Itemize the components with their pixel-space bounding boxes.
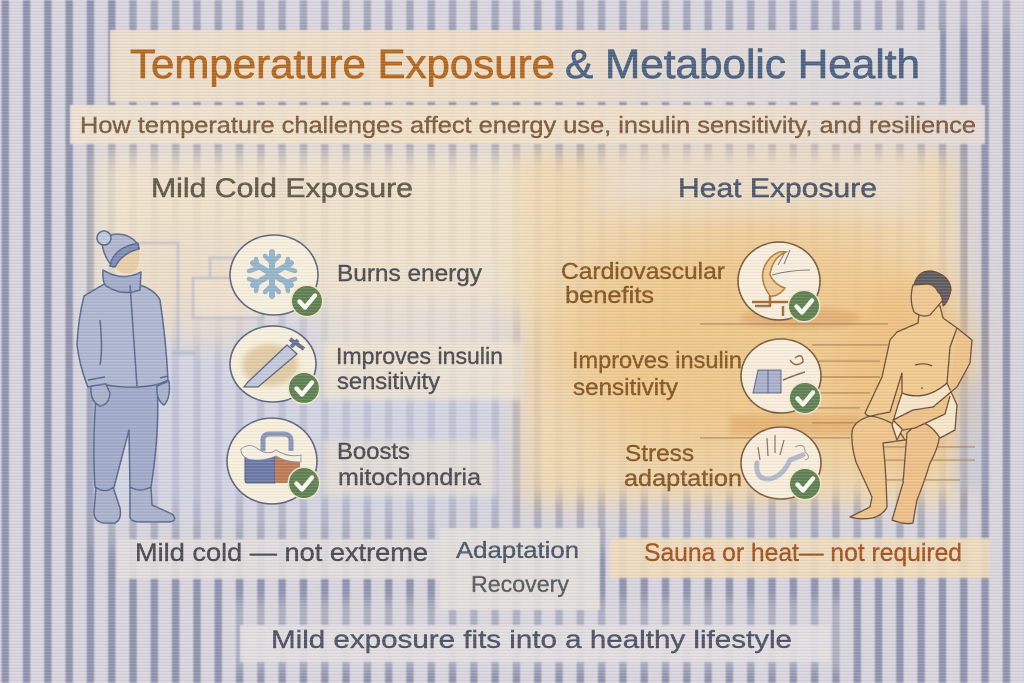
legs [850, 416, 905, 519]
title: & Metabolic Health [565, 41, 920, 87]
icon circle: book and swirl [741, 339, 822, 414]
left benefit labels: Burns energy [337, 260, 483, 286]
right benefit labels [561, 258, 742, 491]
check [288, 466, 320, 500]
subtitle: How temperature challenges affect energy use, insulin sensitivity, and resilience [80, 112, 976, 138]
check [788, 468, 822, 500]
left benefit labels: Improves insulin [336, 343, 503, 369]
caption panel: mild cold [118, 539, 440, 579]
center panel: adaptation and recovery [440, 528, 600, 610]
right benefit labels: Stress [625, 440, 694, 466]
near arm [893, 328, 972, 430]
trousers [94, 383, 158, 490]
left benefit labels: mitochondria [338, 464, 481, 490]
left benefit labels: sensitivity [337, 368, 441, 394]
check [788, 290, 820, 322]
shorts [892, 383, 957, 440]
torso [865, 306, 957, 416]
figure: person in winter clothing [77, 231, 175, 523]
icon circle: syringe [230, 326, 320, 404]
jacket [77, 283, 168, 387]
right benefit labels: sensitivity [573, 374, 679, 400]
left benefit labels [322, 255, 522, 496]
check [788, 382, 822, 414]
footer panel: Mild exposure fits into a healthy lifestyle [271, 626, 792, 654]
heading: mild cold exposure: Mild Cold Exposure [151, 173, 413, 203]
icon circle: snowflake [230, 235, 324, 318]
right benefit labels: Cardiovascular [561, 258, 725, 284]
icon circle: heart [738, 242, 820, 322]
icon circle: split box [227, 418, 320, 504]
boots [94, 487, 120, 523]
subtitle panel [70, 105, 985, 144]
face [115, 248, 139, 274]
hat [102, 234, 139, 267]
footer panel [240, 625, 830, 662]
left benefit labels: Boosts [337, 438, 410, 464]
cold background scene [140, 243, 263, 353]
right benefit labels: benefits [565, 282, 654, 308]
heading: heat exposure: Heat Exposure [678, 173, 877, 203]
head [911, 279, 943, 316]
title panel [110, 30, 940, 102]
icon circle: stress wave [741, 427, 822, 500]
right benefit labels: adaptation [624, 465, 742, 491]
center panel: adaptation and recovery: Recovery [471, 571, 569, 597]
center panel: adaptation and recovery: Adaptation [456, 537, 579, 563]
right benefit labels: Improves insulin [572, 347, 742, 373]
caption panel: mild cold: Mild cold — not extreme [135, 539, 428, 567]
check [288, 372, 320, 404]
check [290, 284, 324, 318]
figure: seated man [850, 271, 972, 524]
caption panel: sauna: Sauna or heat— not required [644, 539, 962, 567]
title [130, 41, 920, 87]
hands [91, 384, 110, 406]
sauna bench [700, 307, 975, 480]
caption panel: sauna [610, 538, 990, 578]
collar [103, 270, 141, 292]
title: Temperature Exposure [130, 41, 555, 87]
